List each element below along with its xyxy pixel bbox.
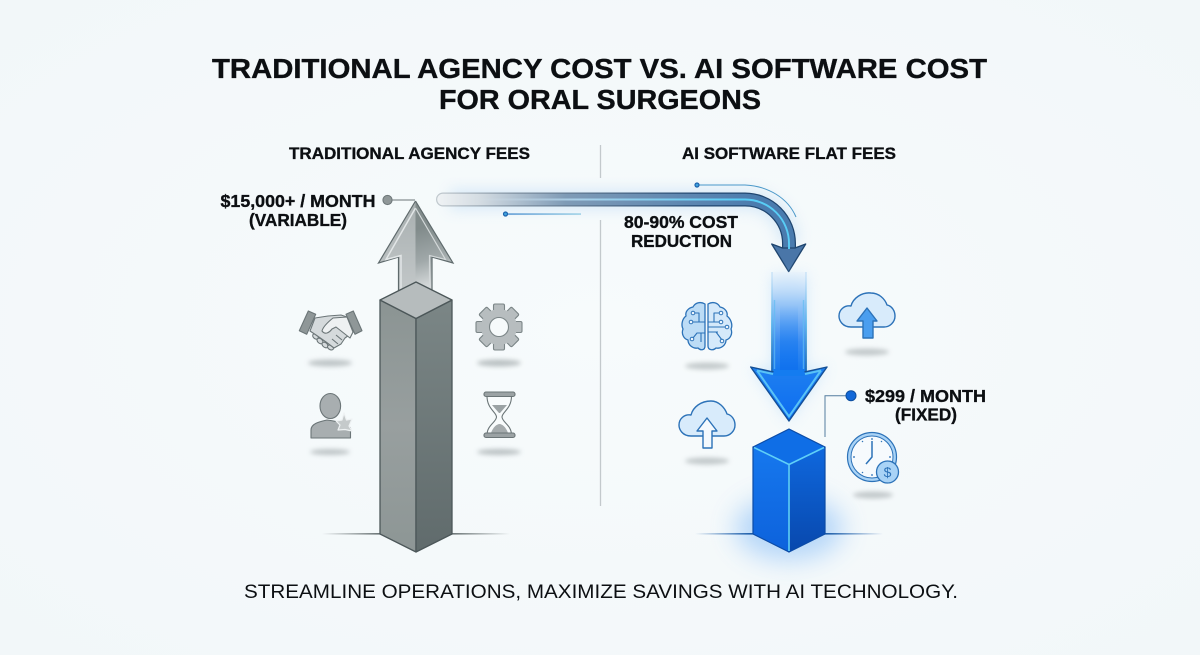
cost bar: traditional [380,282,452,552]
title: TRADITIONAL AGENCY COST VS. AI SOFTWARE COST [212,53,987,84]
panel: AI software column [679,272,986,560]
icon: down arrow [751,272,827,421]
heading: AI software flat fees: AI SOFTWARE FLAT FEES [682,144,896,163]
icon: AI brain [682,303,732,370]
callout: cost reduction: REDUCTION [631,231,732,251]
value label: $299 / month: (FIXED) [895,404,957,424]
cost bar: AI software [753,429,825,552]
center divider [600,145,602,506]
value label: $299 / month [825,386,986,437]
icon: person with star [310,394,352,455]
accent line: lower [504,212,581,216]
icon: cloud upload, top right [839,293,895,356]
icon: clock with dollar [848,432,898,498]
icon: up arrow [378,201,453,295]
title [212,53,987,115]
tagline: STREAMLINE OPERATIONS, MAXIMIZE SAVINGS WITH AI TECHNOLOGY. [244,582,958,603]
value label: $15,000+ / month [220,191,415,230]
icon: hourglass [477,392,521,455]
ground line: right [695,533,883,535]
heading: traditional agency fees: TRADITIONAL AGENCY FEES [289,144,530,163]
value label: $15,000+ / month: (VARIABLE) [249,210,347,230]
ground line: left [322,533,510,535]
panel: traditional agency column [220,191,522,552]
accent line: upper [695,183,796,217]
callout: cost reduction: 80-90% COST [624,212,738,232]
value label: $15,000+ / month: $15,000+ / MONTH [220,191,376,211]
arrow: curved cost reduction arrow [443,200,806,272]
glow: blue base [735,496,843,560]
icon: handshake [299,311,362,366]
title: FOR ORAL SURGEONS [439,84,761,115]
icon: gear [476,304,522,366]
value label: $299 / month: $299 / MONTH [865,386,986,406]
icon: cloud upload, left [679,401,735,464]
icon: clock with dollar: $ [884,464,892,480]
glow: curved arrow [450,200,789,244]
callout: cost reduction [624,212,738,251]
